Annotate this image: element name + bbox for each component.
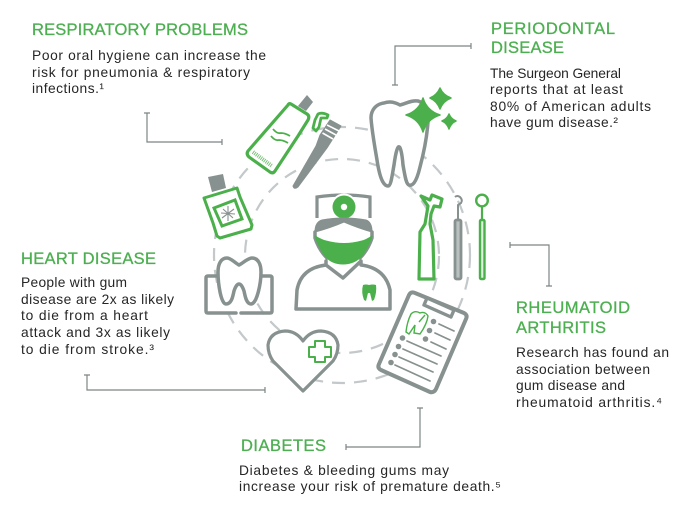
text block: periodontal disease: DISEASE [491,39,564,57]
text block: periodontal disease: 80% of American adults [490,99,651,114]
connector: respiratory [144,113,222,145]
text block: respiratory problems: Poor oral hygiene can increase the [32,48,266,63]
text block: heart disease [21,250,174,357]
text block: respiratory problems [32,21,266,96]
text block: diabetes: DIABETES [241,437,326,455]
head mirror band [317,195,370,218]
icon: sparkling tooth [371,88,456,186]
text block: rheumatoid arthritis: gum disease and [516,378,625,393]
text block: rheumatoid arthritis: Research has found an [516,345,669,360]
text block: periodontal disease: reports that at least [490,82,623,97]
head mirror [330,194,358,220]
text block: periodontal disease: have gum disease.² [490,115,618,130]
text block: heart disease: attack and 3x as likely [21,325,170,340]
icon: dental mirror [476,195,488,279]
text block: diabetes: Diabetes & bleeding gums may [239,463,449,478]
text block: rheumatoid arthritis: association between [516,362,650,377]
text block: rheumatoid arthritis: rheumatoid arthritis.⁴ [516,395,662,410]
text block: rheumatoid arthritis: RHEUMATOID [516,299,630,317]
text block: heart disease: to die from a heart [21,308,148,323]
text block: diabetes: increase your risk of premature death.⁵ [239,479,501,494]
icon: dental probe [455,196,462,279]
icon: tooth in gum [206,258,272,313]
text block: periodontal disease [490,20,651,130]
head cap [315,218,372,232]
text block: rheumatoid arthritis: ARTHRITIS [516,319,606,337]
icon: dentist figure [296,194,390,309]
body [296,261,390,309]
connector: heart disease [84,375,265,393]
connector: periodontal [392,43,471,85]
icon: clipboard [378,292,467,392]
text block: respiratory problems: risk for pneumonia & respiratory [32,65,250,80]
text block: respiratory problems: infections.¹ [32,81,104,96]
text block: periodontal disease: PERIODONTAL [491,20,615,38]
text block: diabetes [239,437,501,494]
text block: heart disease: HEART DISEASE [21,250,156,268]
text block: periodontal disease: The Surgeon General [490,66,621,81]
icon: toothpaste tube [247,95,313,173]
tooth badge [362,284,376,301]
text block: heart disease: to die from stroke.³ [21,342,154,357]
text block: heart disease: disease are 2x as likely [21,292,174,307]
connector: rheumatoid [510,242,552,286]
text block: rheumatoid arthritis [516,299,669,410]
icon: heart with cross [268,331,338,391]
text block: respiratory problems: RESPIRATORY PROBLEMS [32,21,248,39]
face mask [315,236,372,264]
text block: heart disease: People with gum [21,275,127,290]
connector: diabetes [346,408,423,450]
icon: mouthwash bottle [204,174,252,238]
icon: toothbrush [293,113,341,188]
icon: dental handpiece [419,195,442,279]
